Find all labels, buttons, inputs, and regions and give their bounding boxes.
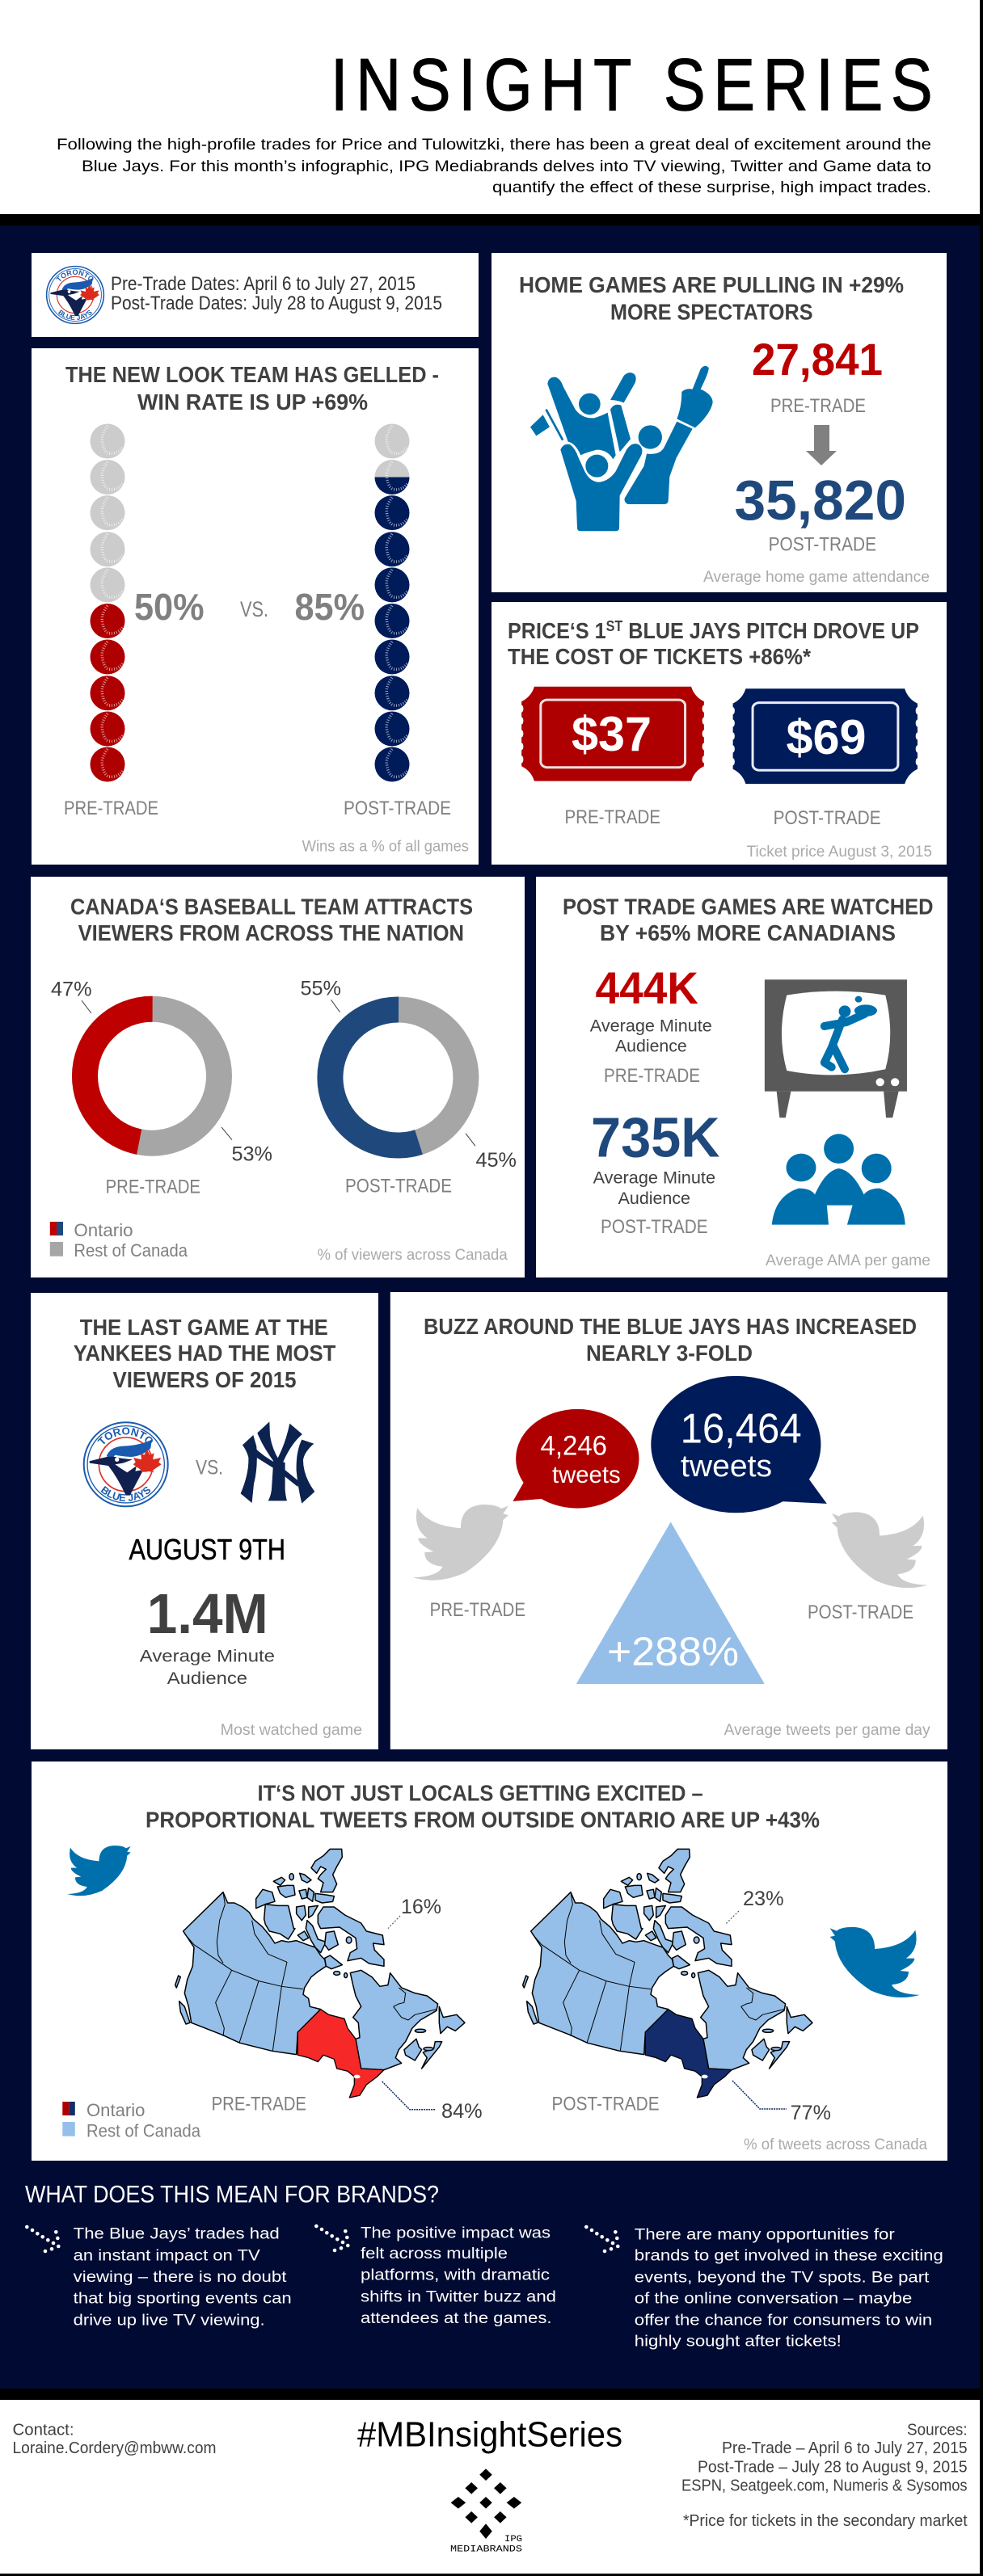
labels: POST-TRADE	[774, 807, 881, 829]
map labels: POST-TRADE	[551, 2094, 660, 2115]
legend: Ontario	[74, 1220, 133, 1240]
text: point three: of the online conversation – maybe	[635, 2291, 912, 2308]
sources	[681, 2421, 968, 2530]
stat: growth triangle: +288%	[607, 1629, 739, 1674]
text: point two: The positive impact was	[361, 2225, 551, 2241]
heading: VIEWERS OF 2015	[113, 1367, 296, 1392]
contact: Contact:	[13, 2421, 74, 2439]
heading: THE COST OF TICKETS +86%*	[508, 644, 811, 669]
callout: pre-trade tweets: tweets	[552, 1462, 621, 1488]
heading: YANKEES HAD THE MOST	[74, 1341, 335, 1366]
stat: most watched game: 1.4M	[147, 1582, 268, 1645]
map: post-trade	[523, 1849, 812, 2109]
heading	[563, 894, 933, 945]
note: Average AMA per game	[766, 1252, 930, 1269]
heading: VIEWERS FROM ACROSS THE NATION	[78, 920, 464, 945]
chart: pre-trade donut: 47%	[51, 979, 92, 1001]
panel: win rate	[32, 348, 479, 865]
text: point three: brands to get involved in these exciting	[635, 2248, 943, 2265]
labels: PRE-TRADE	[564, 806, 660, 828]
note: Wins as a % of all games	[302, 838, 469, 855]
labels	[564, 806, 881, 829]
stat: most watched game	[129, 1533, 285, 1688]
title: INSIGHT SERIES	[331, 44, 933, 125]
text: point two: attendees at the games.	[361, 2310, 551, 2327]
icon: right twitter bird	[830, 1927, 920, 1997]
sources: Sources:	[907, 2421, 968, 2439]
text: point three	[635, 2227, 943, 2350]
chart: post-trade donut: POST-TRADE	[345, 1176, 452, 1198]
callout: post-trade tweets	[651, 1376, 827, 1513]
text: point two: felt across multiple	[361, 2246, 508, 2262]
text: point one: an instant impact on TV	[74, 2247, 260, 2264]
ticket: pre-trade: $37	[572, 707, 652, 761]
heading: MORE SPECTATORS	[610, 299, 813, 325]
chart: pre-trade donut: PRE-TRADE	[106, 1176, 200, 1198]
heading: BLUE JAYS PITCH DROVE UP	[622, 618, 919, 643]
icon: IPG Mediabrands logo	[450, 2469, 522, 2555]
chart: pre-trade donut: 53%	[231, 1143, 272, 1166]
legend	[50, 1220, 188, 1261]
stat: most watched game: Audience	[167, 1669, 247, 1688]
hashtag: #MBInsightSeries	[357, 2415, 622, 2455]
heading: PROPORTIONAL TWEETS FROM OUTSIDE ONTARIO ARE UP +43%	[146, 1808, 820, 1833]
ticket: pre-trade	[520, 687, 706, 781]
icon: Blue Jays logo: BLUE JAYS	[100, 1486, 150, 1501]
note: Most watched game	[221, 1722, 362, 1739]
intro text: quantify the effect of these surprise, high impact trades.	[492, 179, 931, 196]
icon: bullet one	[25, 2225, 61, 2253]
icon: left twitter bird	[67, 1846, 131, 1896]
icon: pre-trade bird	[413, 1505, 508, 1581]
stat: most watched game: Average Minute	[140, 1648, 275, 1666]
text: point two: platforms, with dramatic	[361, 2267, 550, 2284]
legend: Rest of Canada	[74, 1240, 188, 1261]
footer	[0, 2400, 980, 2574]
dates text: Post-Trade Dates: July 28 to August 9, 2015	[111, 293, 442, 314]
heading: BY +65% MORE CANADIANS	[600, 920, 896, 945]
ticket: post-trade: $69	[786, 710, 867, 764]
stat: most watched game: AUGUST 9TH	[129, 1533, 285, 1566]
dates text	[111, 273, 442, 314]
contact	[13, 2421, 217, 2457]
chart: post-trade donut: 55%	[301, 978, 341, 1000]
panel: TV audience	[536, 877, 947, 1277]
map labels: 23%	[743, 1888, 784, 1910]
stat: post-trade attendance: 35,820	[734, 469, 906, 532]
chart: pre-trade donut	[51, 979, 272, 1198]
heading: HOME GAMES ARE PULLING IN +29%	[519, 272, 904, 297]
map labels: 84%	[441, 2100, 483, 2123]
icon: bullet two	[314, 2225, 350, 2252]
heading	[146, 1780, 820, 1833]
panel: tweets across Canada	[32, 1762, 947, 2161]
legend: Rest of Canada	[86, 2120, 201, 2140]
icon: Blue Jays logo: TORONTO	[97, 1427, 153, 1445]
icon: Blue Jays logo	[82, 1421, 169, 1508]
icon: bullet three	[584, 2225, 620, 2253]
stat: pre-trade attendance: PRE-TRADE	[770, 395, 866, 417]
text: point three: offer the chance for consumers to win	[635, 2312, 932, 2329]
map labels: PRE-TRADE	[212, 2094, 306, 2115]
heading	[74, 1315, 335, 1392]
text: point three: highly sought after tickets!	[635, 2333, 842, 2350]
stat: post-trade attendance: POST-TRADE	[769, 534, 876, 556]
legend: Ontario	[86, 2100, 145, 2120]
text: point two	[361, 2225, 556, 2327]
labels: PRE-TRADE	[64, 798, 158, 819]
heading: CANADA‘S BASEBALL TEAM ATTRACTS	[70, 894, 473, 920]
heading: WHAT DOES THIS MEAN FOR BRANDS?	[25, 2182, 439, 2208]
heading: ST	[606, 618, 622, 634]
sources: Pre-Trade – April 6 to July 27, 2015	[722, 2439, 968, 2457]
stat: 50 vs 85: 50%	[134, 586, 204, 628]
icon: Blue Jays logo: BLUE JAYS	[58, 309, 92, 320]
icon: IPG Mediabrands logo: IPG	[504, 2535, 522, 2544]
stat: pre-trade AMA: PRE-TRADE	[604, 1065, 700, 1087]
labels: PRE-TRADE	[430, 1599, 525, 1621]
callout: pre-trade tweets: 4,246	[540, 1431, 607, 1462]
chart: pre-trade baseballs	[91, 423, 124, 782]
text: point three: There are many opportunities for	[635, 2227, 896, 2244]
panel: most watched game	[31, 1293, 378, 1749]
icon: Blue Jays logo: TORONTO	[56, 270, 94, 281]
callout: post-trade tweets: 16,464	[681, 1406, 802, 1453]
icon: cheering fans	[530, 366, 713, 531]
sources: Post-Trade – July 28 to August 9, 2015	[698, 2458, 968, 2476]
vs: VS.	[196, 1456, 223, 1479]
icon: audience	[772, 1134, 905, 1225]
heading: POST TRADE GAMES ARE WATCHED	[563, 894, 933, 920]
callout: pre-trade tweets	[513, 1409, 639, 1509]
note: Ticket price August 3, 2015	[747, 844, 932, 861]
text: point one: The Blue Jays’ trades had	[74, 2226, 280, 2243]
text: point one	[74, 2226, 292, 2329]
heading: THE NEW LOOK TEAM HAS GELLED -	[65, 362, 439, 387]
stat: pre-trade AMA: Audience	[615, 1038, 687, 1056]
stat: post-trade AMA: POST-TRADE	[601, 1216, 708, 1238]
heading	[424, 1314, 917, 1366]
icon: IPG Mediabrands logo: MEDIABRANDS	[450, 2545, 522, 2555]
stat: pre-trade AMA: Average Minute	[590, 1017, 712, 1036]
note: % of tweets across Canada	[744, 2136, 927, 2153]
labels	[430, 1599, 913, 1623]
section: what does this mean for brands	[25, 2182, 943, 2350]
labels: POST-TRADE	[344, 798, 451, 819]
header band	[0, 0, 980, 214]
panel: ticket prices	[492, 602, 947, 865]
heading: WIN RATE IS UP +69%	[137, 389, 368, 415]
map labels: 77%	[791, 2102, 831, 2124]
text: point one: viewing – there is no doubt	[74, 2269, 287, 2286]
stat: pre-trade AMA	[590, 962, 712, 1087]
labels: POST-TRADE	[808, 1602, 913, 1623]
ticket: post-trade	[731, 688, 919, 784]
intro text: Following the high-profile trades for Price and Tulowitzki, there has been a great deal of excitement around the	[57, 136, 931, 154]
stat: pre-trade attendance	[752, 334, 883, 417]
icon: Blue Jays logo	[45, 265, 105, 325]
heading	[508, 618, 919, 669]
heading: PRICE‘S 1	[508, 618, 617, 643]
intro text	[57, 136, 931, 196]
contact: Loraine.Cordery@mbww.com	[13, 2439, 217, 2457]
panel: home game attendance	[492, 253, 947, 592]
labels	[64, 798, 451, 819]
note: Average tweets per game day	[724, 1722, 930, 1739]
map labels	[212, 1888, 831, 2124]
sources: *Price for tickets in the secondary market	[683, 2512, 968, 2530]
legend	[62, 2100, 201, 2140]
stat: post-trade AMA: Audience	[618, 1189, 690, 1208]
stat: post-trade AMA	[591, 1106, 719, 1238]
heading: BUZZ AROUND THE BLUE JAYS HAS INCREASED	[424, 1314, 917, 1339]
stat: pre-trade AMA: 444K	[595, 962, 698, 1013]
text: point three: events, beyond the TV spots. Be part	[635, 2269, 930, 2286]
arrow	[806, 425, 837, 465]
stat: growth triangle	[576, 1522, 765, 1684]
stat: 50 vs 85	[134, 586, 365, 628]
note: % of viewers across Canada	[317, 1247, 508, 1264]
stat: post-trade AMA: Average Minute	[593, 1168, 715, 1187]
heading	[65, 362, 439, 415]
heading	[519, 272, 904, 325]
intro text: Blue Jays. For this month’s infographic, IPG Mediabrands delves into TV viewing, Twitter and Game data to	[82, 158, 931, 175]
chart: post-trade donut	[301, 978, 517, 1198]
text: point one: drive up live TV viewing.	[74, 2312, 265, 2329]
stat: 50 vs 85: VS.	[240, 597, 268, 621]
icon: post-trade bird	[832, 1512, 927, 1588]
panel: twitter buzz	[390, 1292, 947, 1749]
map labels: 16%	[401, 1896, 441, 1918]
icon: Yankees logo	[241, 1421, 314, 1504]
heading: IT‘S NOT JUST LOCALS GETTING EXCITED –	[257, 1780, 703, 1805]
panel: trade dates	[32, 253, 479, 337]
heading	[70, 894, 473, 945]
panel: viewers across Canada	[31, 877, 525, 1277]
chart: post-trade baseballs	[375, 423, 409, 782]
text: point two: shifts in Twitter buzz and	[361, 2288, 556, 2305]
note: Average home game attendance	[703, 569, 930, 586]
stat: pre-trade attendance: 27,841	[752, 334, 883, 385]
heading: THE LAST GAME AT THE	[80, 1315, 328, 1340]
map: pre-trade	[175, 1849, 465, 2110]
text: point one: that big sporting events can	[74, 2290, 292, 2307]
stat: 50 vs 85: 85%	[294, 586, 365, 628]
icon: television	[765, 979, 907, 1118]
heading: NEARLY 3-FOLD	[586, 1341, 753, 1366]
dates text: Pre-Trade Dates: April 6 to July 27, 2015	[111, 273, 416, 295]
stat: post-trade AMA: 735K	[591, 1106, 719, 1169]
chart: post-trade donut: 45%	[475, 1149, 517, 1172]
callout: post-trade tweets: tweets	[681, 1450, 772, 1484]
